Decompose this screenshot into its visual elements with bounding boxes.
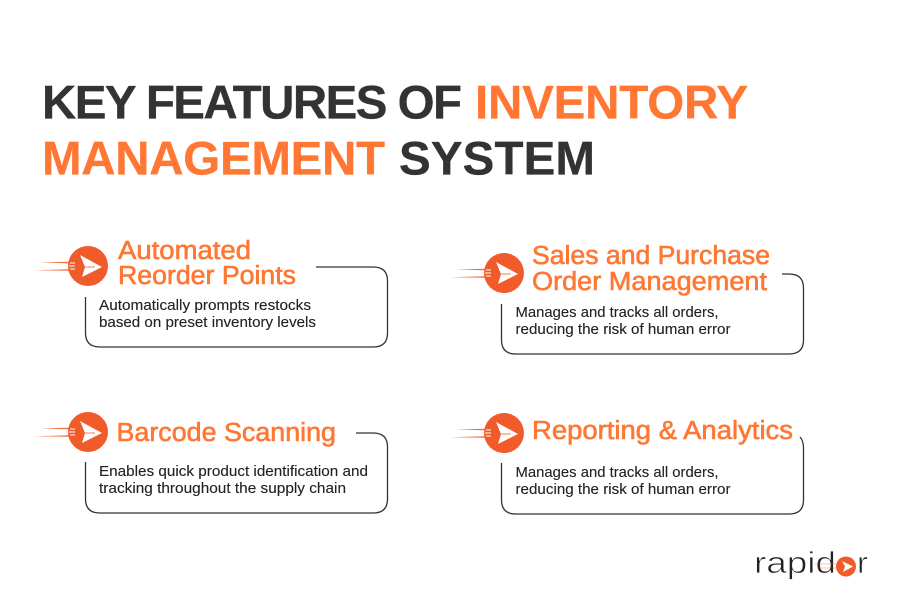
icon: paper plane <box>450 413 524 453</box>
description <box>516 305 731 338</box>
description: Manages and tracks all orders, <box>516 465 718 481</box>
panel: automated reorder points <box>34 237 388 347</box>
description: tracking throughout the supply chain <box>99 481 346 497</box>
description: reducing the risk of human error <box>516 482 731 498</box>
icon: paper plane <box>450 253 524 293</box>
icon: paper plane <box>34 412 108 452</box>
logo: rapidor: rapid <box>754 545 836 580</box>
title: MANAGEMENT <box>42 132 385 186</box>
logo: rapidor: r <box>857 545 868 580</box>
logo: rapidor <box>754 545 868 580</box>
heading: Barcode Scanning <box>116 419 336 447</box>
heading: Reorder Points <box>118 262 296 290</box>
description: Enables quick product identification and <box>99 464 368 480</box>
panel: barcode scanning <box>34 412 388 513</box>
panel outline <box>86 267 388 347</box>
description <box>99 464 368 497</box>
heading <box>532 242 770 296</box>
panel: sales and purchase order management <box>450 242 804 354</box>
description: Manages and tracks all orders, <box>516 305 718 321</box>
heading: Automated <box>118 237 251 265</box>
title: SYSTEM <box>399 132 595 186</box>
panel outline <box>502 274 804 354</box>
description: reducing the risk of human error <box>516 322 731 338</box>
icon: paper plane <box>34 246 108 286</box>
heading: Order Management <box>532 268 767 296</box>
title <box>42 76 748 186</box>
title: INVENTORY <box>475 76 748 130</box>
description <box>516 465 731 498</box>
description: Automatically prompts restocks <box>99 298 311 314</box>
heading <box>118 237 296 290</box>
panel outline <box>86 433 388 513</box>
description <box>99 298 316 331</box>
panel outline <box>502 437 804 514</box>
title: KEY FEATURES OF <box>42 76 462 130</box>
description: based on preset inventory levels <box>99 315 316 331</box>
heading: Reporting & Analytics <box>532 417 793 445</box>
heading: Sales and Purchase <box>532 242 770 270</box>
panel: reporting and analytics <box>450 413 804 514</box>
